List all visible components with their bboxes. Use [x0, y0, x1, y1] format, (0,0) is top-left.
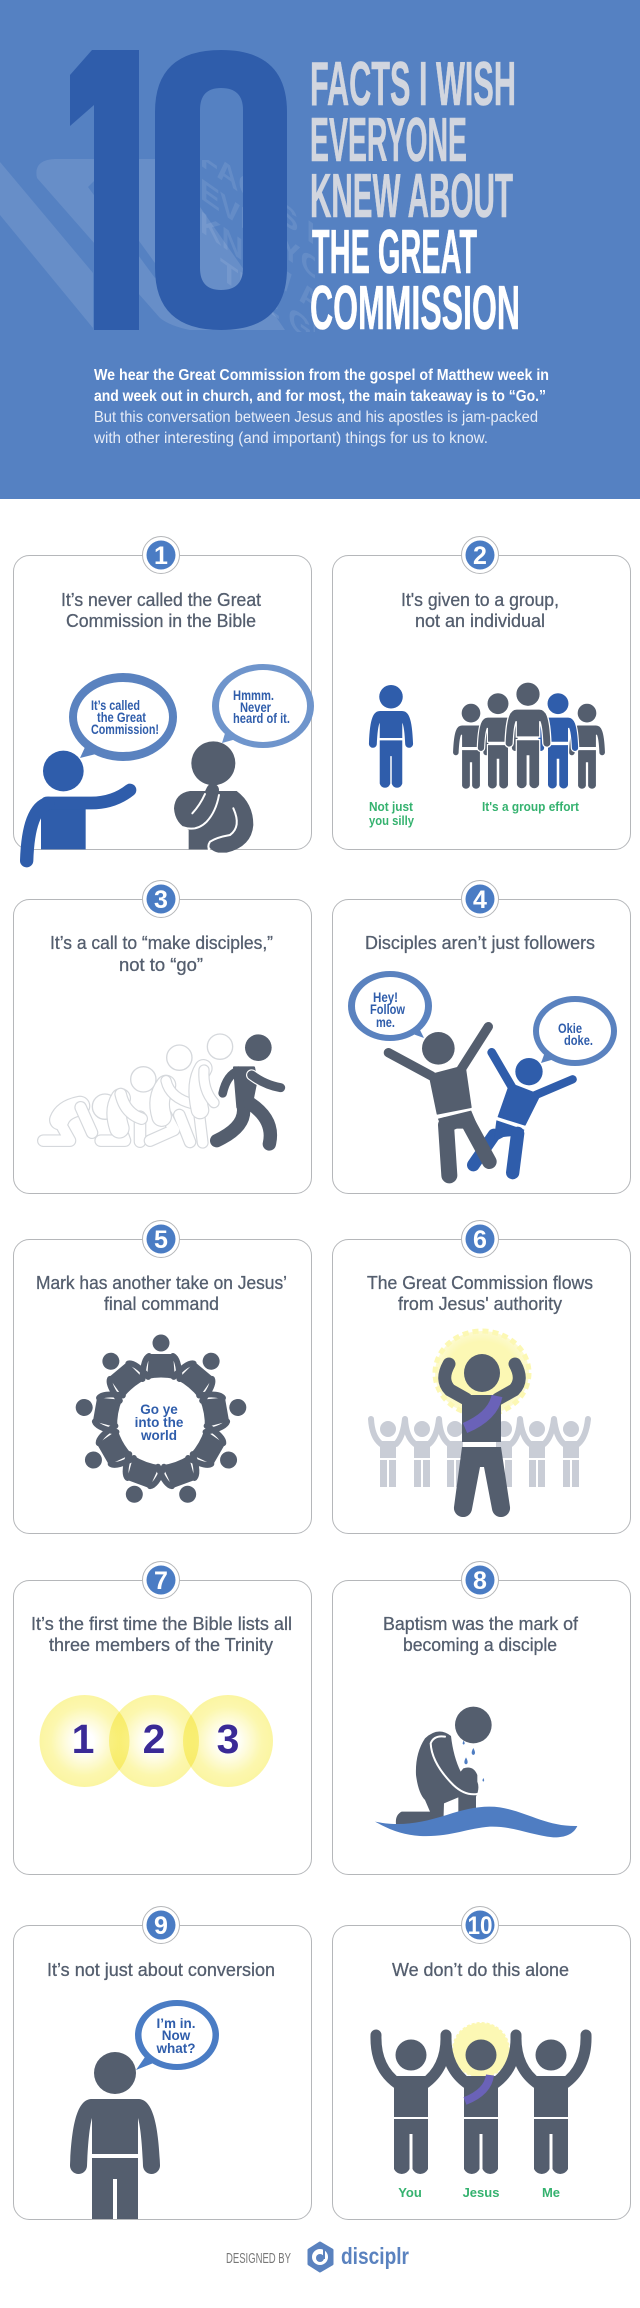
caption: group effort: It's a group effort [482, 799, 580, 814]
badge 3 [142, 880, 180, 918]
badge 2 [462, 536, 498, 574]
figure: grey leader [388, 1027, 489, 1175]
badge 9 [142, 1906, 180, 1944]
speech bubble: Hmmm: Hmmm. [233, 688, 274, 703]
panel 5: Mark's take [14, 1220, 312, 1534]
badge 4 [462, 880, 498, 918]
heading 5: Mark has another take on Jesus’ [36, 1272, 287, 1293]
heading 7: three members of the Trinity [49, 1634, 274, 1655]
title [310, 50, 520, 343]
heading 2: not an individual [415, 610, 545, 631]
panel 8: baptism [332, 1562, 630, 1874]
logo mark [309, 2243, 332, 2271]
figure: Jesus arms raised [445, 1354, 519, 1517]
glow behind Jesus [453, 2023, 509, 2077]
speech bubble: It's called the Great Commission: It’s called [91, 698, 140, 713]
figure: thinking grey person [174, 741, 253, 853]
badge 1 [142, 536, 180, 574]
panel 6: authority [332, 1220, 630, 1534]
digits: 3 [217, 1716, 239, 1762]
figure: circle of people [73, 1334, 249, 1509]
speech bubble: Hmmm [212, 664, 314, 748]
caption: not just you [369, 799, 415, 828]
badge 4: 4 [473, 886, 487, 914]
badge 8: 8 [473, 1567, 487, 1595]
background watermark: FACTS I WISH [200, 139, 402, 313]
background watermark: KNEW ABOUT [200, 205, 406, 382]
speech bubble: I'm in: I’m in. [156, 2016, 196, 2031]
big number 10 [70, 50, 287, 330]
captions: Me [542, 2185, 560, 2200]
figure: three people arms raised [376, 2035, 586, 2174]
footer credit: DESIGNED BY [226, 2250, 291, 2267]
heading 1: Commission in the Bible [66, 610, 256, 631]
badge 10 [462, 1906, 498, 1944]
heading 5 [36, 1272, 287, 1314]
heading 7 [31, 1613, 292, 1655]
figure: ghost crawlers evolving [43, 1034, 233, 1143]
heading 5: final command [104, 1293, 219, 1314]
figure: blue pointing person [27, 751, 130, 861]
intro text: and week out in church, and for most, the main takeaway is to “Go.” [94, 388, 546, 405]
panel 10: not alone [332, 1906, 630, 2220]
intro text: with other interesting (and important) things for us to know. [93, 430, 488, 447]
heading 6: The Great Commission flows [367, 1272, 593, 1293]
centre text: world [140, 1428, 177, 1443]
speech bubble: Okie doke: Okie [558, 1021, 582, 1036]
speech bubble: Hmmm: Never [240, 700, 272, 715]
heading 8: becoming a disciple [403, 1634, 557, 1655]
badge 6: 6 [473, 1226, 487, 1254]
digits: 2 [143, 1716, 165, 1762]
speech bubble: Hey follow me: me. [376, 1015, 395, 1030]
glow behind Jesus [435, 1331, 529, 1415]
intro text: We hear the Great Commission from the gospel of Matthew week in [94, 367, 549, 384]
figure: lone blue person [369, 685, 413, 788]
panel 3: make disciples [14, 880, 312, 1194]
heading 7: It’s the first time the Bible lists all [31, 1613, 292, 1634]
intro text: But this conversation between Jesus and his apostles is jam-packed [94, 409, 538, 426]
captions [398, 2185, 560, 2200]
centre text: Go ye [140, 1402, 178, 1417]
badge 7 [142, 1562, 180, 1598]
heading 2 [401, 589, 559, 631]
figure: dark walking person [217, 1034, 281, 1144]
heading 3: not to “go” [119, 954, 203, 975]
header banner [0, 0, 640, 499]
background watermark [0, 159, 315, 332]
footer credit [226, 2243, 409, 2271]
speech bubble: Okie doke: doke. [564, 1033, 593, 1048]
heading 8: Baptism was the mark of [383, 1613, 579, 1634]
digits [72, 1716, 239, 1762]
figure: blue follower [473, 1052, 573, 1173]
heading 2: It's given to a group, [401, 589, 559, 610]
speech bubble: I'm in: Now [162, 2028, 191, 2043]
badge 8 [462, 1562, 498, 1598]
panel 1: never called the Great Commission [14, 536, 314, 861]
badge 2: 2 [473, 542, 487, 570]
speech bubble: I'm in: what? [156, 2041, 196, 2056]
centre text: into the [135, 1415, 184, 1430]
heading 3: It’s a call to “make disciples,” [50, 932, 273, 953]
heading 9: It’s not just about conversion [47, 1959, 275, 1980]
figure: three glowing circles [40, 1695, 273, 1787]
sash [465, 2075, 490, 2101]
logo wordmark: disciplr [341, 2243, 409, 2269]
heading 1 [61, 589, 261, 631]
badge 3: 3 [154, 886, 168, 914]
heading 1: It’s never called the Great [61, 589, 261, 610]
water wave [375, 1807, 577, 1837]
heading 8 [383, 1613, 579, 1655]
badge 5 [142, 1220, 180, 1258]
background watermark: THE GREAT [220, 252, 392, 405]
badge 5: 5 [154, 1226, 168, 1254]
figure: group of five [453, 682, 605, 789]
panel 4: disciples aren't just followers [332, 880, 630, 1194]
panel 2: given to a group [332, 536, 630, 850]
digits: 1 [72, 1716, 94, 1762]
speech bubble: Okie doke [533, 996, 617, 1066]
figure: person standing [70, 2052, 160, 2219]
heading 10: We don’t do this alone [392, 1959, 569, 1980]
speech bubble: Hey follow me: Hey! [373, 990, 398, 1005]
badge 10: 10 [468, 1912, 492, 1940]
badge 7: 7 [154, 1567, 168, 1595]
speech bubble: It's called the Great Commission: Commission! [91, 722, 159, 737]
speech bubble: It's called the Great Commission [69, 673, 177, 761]
badge 9: 9 [154, 1912, 168, 1940]
centre text [135, 1402, 184, 1443]
badge 6 [462, 1220, 498, 1258]
figure: ghost crowd [371, 1419, 588, 1487]
captions: You [398, 2185, 422, 2200]
badge 1: 1 [154, 542, 168, 570]
heading 3 [50, 932, 273, 975]
heading 6: from Jesus' authority [398, 1293, 563, 1314]
intro text [93, 367, 549, 447]
speech bubble: It's called the Great Commission: the Great [97, 710, 146, 725]
heading 4: Disciples aren’t just followers [365, 932, 595, 953]
heading 6 [367, 1272, 593, 1314]
captions: Jesus [463, 2185, 499, 2200]
panel 9: conversion [14, 1906, 312, 2220]
speech bubble: I'm in [135, 2000, 219, 2070]
caption: not just you: you silly [369, 813, 415, 828]
caption: not just you: Not just [369, 799, 414, 814]
figure: kneeling person [396, 1707, 492, 1824]
speech bubble: Hmmm: heard of it. [233, 711, 290, 726]
water drops [463, 1741, 484, 1782]
speech bubble: Hey follow me: Follow [370, 1002, 405, 1017]
sash [465, 1396, 497, 1428]
background watermark: EVERYONE [200, 172, 366, 321]
panel 7: Trinity [14, 1562, 312, 1874]
speech bubble: Hey follow me [348, 971, 432, 1041]
